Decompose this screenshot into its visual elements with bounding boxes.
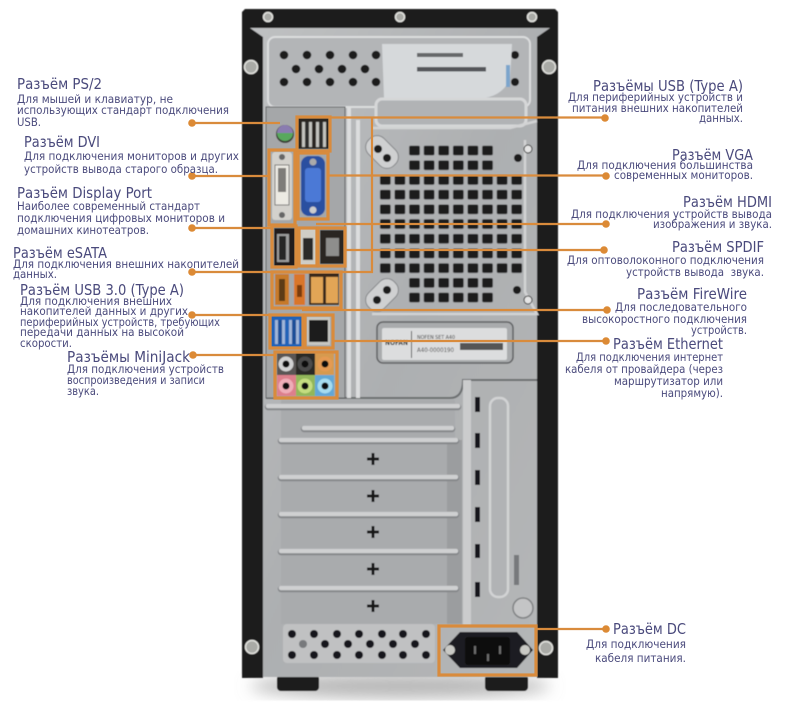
text: DC: кабеля питания. <box>595 651 686 665</box>
right slots and ridge <box>463 380 533 625</box>
vent plate ridge <box>372 121 537 314</box>
text: HDMI: изображения и звука. <box>653 217 772 231</box>
USB top ports <box>298 118 329 149</box>
IO plate <box>266 107 345 398</box>
text: Ethernet: кабеля от провайдера (через <box>565 362 723 376</box>
text: USB 3.0: скорости. <box>20 336 72 350</box>
product sticker: NOFAN <box>385 339 408 347</box>
text: DC: Для подключения <box>586 637 686 651</box>
text: USB 3.0: периферийных устройств, требующих <box>20 315 220 329</box>
product sticker: A40-0000190 <box>417 346 454 354</box>
text: HDMI <box>571 193 772 231</box>
frame screws <box>244 12 556 654</box>
text: USB Type A <box>568 77 743 125</box>
text: Display Port: Разъём Display Port <box>17 184 152 202</box>
Ethernet port <box>307 317 330 345</box>
text: FireWire: Разъём FireWire <box>637 285 747 303</box>
VGA port <box>301 156 325 216</box>
text: FireWire: высокоростного подключения <box>582 312 747 326</box>
top vent holes <box>280 51 519 86</box>
text: MiniJack: Для подключения устройств <box>67 362 224 376</box>
text: USB Type A: Разъёмы USB (Type A) <box>593 77 743 95</box>
text: DC: Разъём DC <box>613 620 686 638</box>
label recess <box>377 322 513 363</box>
text: HDMI: Разъём HDMI <box>683 193 772 211</box>
text: PS/2: использующих стандарт подключения <box>17 103 229 117</box>
text: USB Type A: Для периферийных устройств и <box>568 90 743 104</box>
text: HDMI: Для подключения устройств вывода <box>571 207 772 221</box>
text: FireWire: устройств. <box>691 323 747 337</box>
text: eSATA: Для подключения внешних накопителей <box>13 257 239 271</box>
text: MiniJack: воспроизведения и записи <box>67 373 205 387</box>
text: Ethernet: маршрутизатор или <box>614 374 723 388</box>
text: MiniJack <box>67 348 224 398</box>
text: DVI: Для подключения мониторов и других <box>24 149 239 163</box>
USB 3.0 ports <box>271 315 303 347</box>
mounting bosses <box>361 131 532 316</box>
leader dots <box>188 114 611 633</box>
text: VGA: современных мониторов. <box>614 168 753 182</box>
leader lines <box>192 117 607 629</box>
floor shadow <box>250 674 550 698</box>
text: SPDIF: Разъём SPDIF <box>672 238 764 256</box>
expansion slot rails <box>268 400 462 624</box>
text: USB 3.0: передачи данных на высокой <box>20 325 184 339</box>
black case frame <box>242 9 558 678</box>
text: DVI: устройств вывода старого образца. <box>24 162 218 176</box>
text: Display Port: Наиболее современный стандарт <box>17 199 200 213</box>
text: eSATA: Разъём eSATA <box>13 244 108 262</box>
bottom vent panel <box>283 624 435 663</box>
power socket <box>443 632 533 668</box>
text: VGA <box>577 146 754 182</box>
top sticker <box>382 44 512 98</box>
text: DC <box>586 620 686 665</box>
text: Ethernet: Для подключения интернет <box>576 350 723 364</box>
computer tower rear view <box>242 9 558 698</box>
text: USB Type A: данных. <box>699 111 743 125</box>
text: PS/2 <box>17 75 229 129</box>
eSATA, FireWire and USB orange-tinted ports <box>275 273 339 305</box>
text: USB 3.0 <box>20 281 220 350</box>
text: SPDIF: Для оптоволоконного подключения <box>567 253 764 267</box>
text: MiniJack: Разъёмы MiniJack <box>67 348 190 366</box>
PS/2 port <box>276 125 294 143</box>
text: VGA: Для подключения большинства <box>577 158 753 172</box>
text: Ethernet <box>565 335 723 400</box>
orange connector boxes <box>269 117 536 675</box>
text: PS/2: USB. <box>17 115 41 129</box>
text: SPDIF: устройств вывода звука. <box>626 265 764 279</box>
text: USB 3.0: Разъём USB 3.0 (Type A) <box>20 281 184 299</box>
SPDIF port <box>320 230 344 264</box>
metal back plate <box>250 28 550 677</box>
text: USB 3.0: Для подключения внешних <box>20 294 172 308</box>
product sticker: NOFEN SET A40 <box>417 335 455 341</box>
text: VGA: Разъём VGA <box>672 146 754 164</box>
text: MiniJack: звука. <box>67 384 99 398</box>
text: Display Port: подключения цифровых мониторов и <box>17 211 225 225</box>
lower left recess edge <box>266 380 537 398</box>
text: FireWire: Для последовательного <box>615 300 747 314</box>
text: SPDIF <box>567 238 764 279</box>
ventilation grid <box>378 143 524 305</box>
text: PS/2: Для мышей и клавиатур, не <box>17 92 173 106</box>
text: DVI <box>24 133 239 176</box>
text: eSATA <box>13 244 239 281</box>
text: DVI: Разъём DVI <box>24 133 100 151</box>
text: FireWire <box>582 285 747 337</box>
text: Display Port <box>17 184 225 237</box>
plus marks <box>367 453 379 612</box>
text: PS/2: Разъём PS/2 <box>17 75 102 93</box>
top recessed panel <box>268 37 530 107</box>
audio jacks <box>277 353 334 396</box>
text: USB 3.0: накопителей данных и других <box>20 304 188 318</box>
text: USB Type A: питания внешних накопителей <box>572 101 743 115</box>
text: Display Port: домашних кинотеатров. <box>17 223 149 237</box>
DVI port <box>272 152 292 220</box>
text: Ethernet: напрямую). <box>661 386 723 400</box>
ridge under top panel <box>376 99 526 126</box>
feet <box>277 675 528 691</box>
vertical ridges beside IO plate <box>349 108 358 398</box>
HDMI port <box>300 229 316 265</box>
text: Ethernet: Разъём Ethernet <box>613 335 723 353</box>
product sticker <box>382 328 507 360</box>
text: eSATA: данных. <box>13 267 57 281</box>
DisplayPort <box>274 228 295 266</box>
